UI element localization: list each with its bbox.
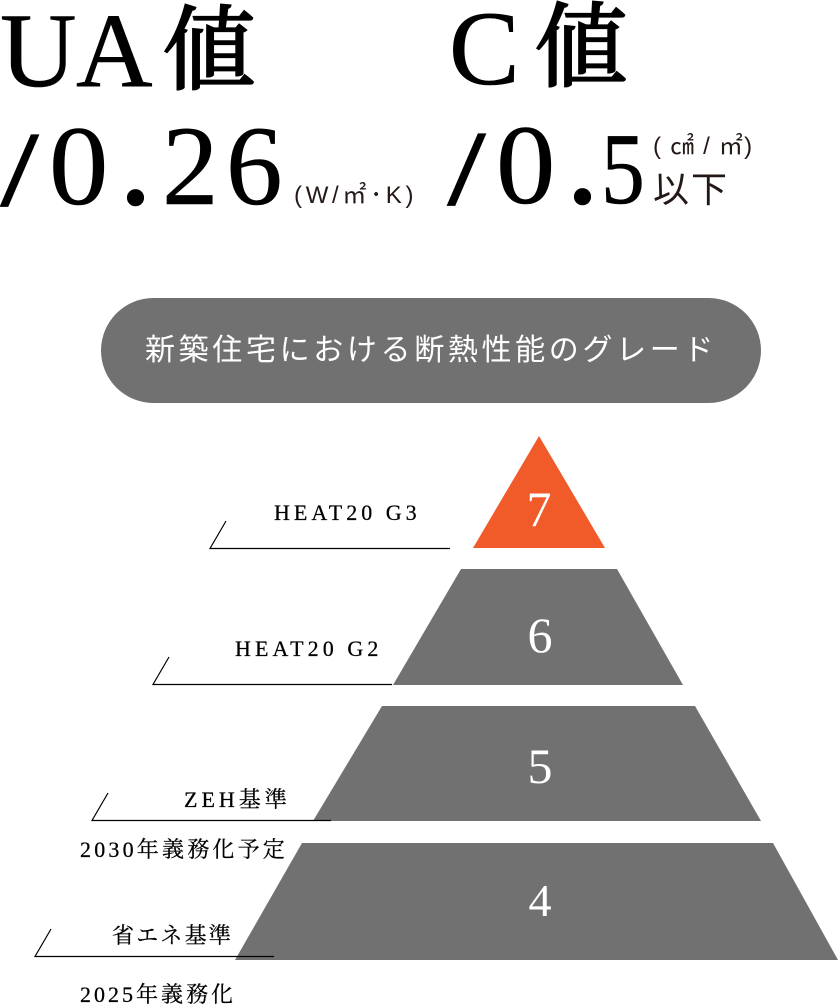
heading: C value: 5 [601, 112, 645, 226]
pyramid tier 4 [235, 843, 838, 960]
heading: UA value: 6 [226, 104, 282, 229]
heading: C value: / [448, 110, 486, 227]
pyramid tier 6: 6 [528, 607, 552, 663]
label: energy saving standard: 省エネ基準 [112, 923, 233, 948]
pyramid tier 4: 4 [528, 875, 552, 926]
unit: W/m2K: (W/㎡･K) [294, 182, 417, 209]
unit: cm2/m2 or less: ( ㎠ / ㎡) [653, 133, 753, 160]
heading: UA value: . [118, 80, 153, 235]
heading: UA value: 値 [163, 0, 255, 102]
pyramid tier 5: 5 [528, 738, 552, 794]
label: energy saving standard [35, 923, 274, 1004]
heading: UA value: 0 [49, 105, 108, 229]
heading: C value: . [565, 79, 600, 234]
label: ZEH standard: 2030年義務化予定 [80, 837, 288, 862]
heading: C value: 値 [535, 0, 627, 99]
pyramid tier 6 [393, 569, 683, 685]
pyramid tier 7 [473, 436, 605, 548]
heading: UA value: / [1, 111, 39, 228]
label: HEAT20 G3 [210, 500, 450, 548]
unit: cm2/m2 or less [653, 133, 753, 210]
heading: C value: 0 [496, 104, 555, 228]
label: ZEH standard [80, 787, 331, 862]
label: HEAT20 G2 [153, 636, 392, 684]
heading: UA value: 2 [162, 104, 218, 229]
pyramid tier 7: 7 [526, 481, 552, 537]
heading: UA value [0, 0, 282, 235]
pyramid tier 5 [313, 706, 761, 821]
unit: cm2/m2 or less: 以下 [653, 169, 729, 210]
heading: C value [448, 0, 645, 234]
label: ZEH standard: ZEH基準 [184, 787, 291, 812]
heading pill: grades of insulation performance: 新築住宅における断熱性能のグレード [145, 334, 717, 367]
label: HEAT20 G2: HEAT20 G2 [235, 636, 383, 661]
label: HEAT20 G3: HEAT20 G3 [274, 500, 421, 525]
heading pill: grades of insulation performance [101, 298, 761, 403]
